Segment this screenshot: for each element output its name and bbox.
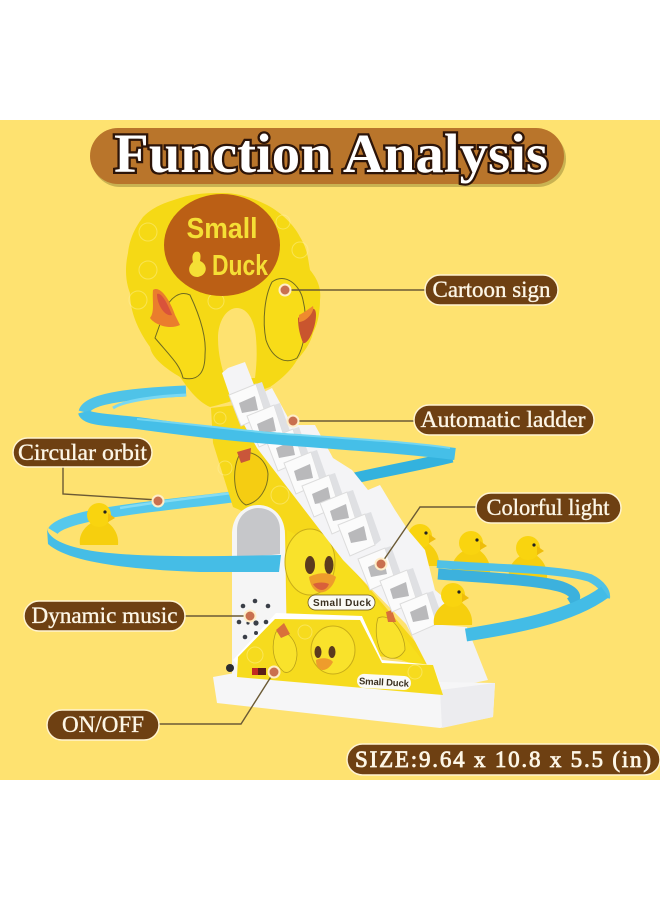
ladder: steps bbox=[229, 382, 443, 635]
speaker holes bbox=[237, 599, 270, 639]
toy ducks behind the ladder bbox=[401, 524, 547, 578]
callout: ON/OFF: ON/OFF bbox=[62, 712, 144, 737]
toy: white arched tower bbox=[232, 505, 287, 680]
switch and jack bbox=[226, 664, 266, 675]
panel: large duck character bbox=[285, 529, 336, 595]
ladder: white toothed band bbox=[222, 362, 470, 625]
cartoon sign board bbox=[126, 193, 320, 407]
panel: flying duck bbox=[273, 631, 297, 672]
toy: upper circular track, back lane bbox=[84, 391, 452, 478]
sign: brown oval bbox=[164, 194, 280, 296]
toy: white stepped base bbox=[213, 613, 495, 728]
panel: Small Duck tag bbox=[308, 595, 375, 610]
callout: Cartoon sign: Cartoon sign bbox=[432, 277, 551, 302]
sign: name text: Small bbox=[186, 213, 258, 245]
toy: right circular track bbox=[437, 564, 606, 635]
callout: Dynamic music: Dynamic music bbox=[32, 603, 177, 628]
callout: Colorful light bbox=[376, 493, 621, 570]
panel: side duck bbox=[376, 617, 405, 658]
panel: Small Duck tag: Small Duck bbox=[313, 598, 371, 609]
callout: Circular orbit: Circular orbit bbox=[18, 440, 148, 465]
callout: Dynamic music bbox=[24, 601, 256, 631]
title banner: Function Analysis bbox=[114, 123, 548, 184]
callout: ON/OFF bbox=[47, 666, 280, 740]
callout: Cartoon sign bbox=[280, 275, 558, 305]
toy: front yellow duck panel bbox=[285, 529, 430, 670]
sign: name text: Duck bbox=[212, 250, 269, 282]
toy duck on lower track bbox=[80, 503, 118, 545]
toy: yellow rear panel with duck pattern bbox=[211, 405, 436, 666]
sign: name text bbox=[186, 213, 269, 282]
sign: left cartoon duck bbox=[150, 289, 205, 379]
toy: upper circular track, front lane bbox=[84, 412, 455, 454]
size label: SIZE:9.64 x 10.8 x 5.5 (in) bbox=[355, 747, 651, 772]
automatic ladder bbox=[222, 362, 470, 635]
callout: Automatic ladder bbox=[288, 405, 594, 435]
toy duck on front of ladder bbox=[434, 583, 472, 625]
sign: faint pattern bbox=[129, 215, 308, 309]
panel: lower duck character bbox=[311, 626, 355, 674]
toy: lower yellow duck panel bbox=[237, 610, 443, 695]
yellow background bbox=[0, 120, 660, 780]
callout: Automatic ladder: Automatic ladder bbox=[420, 407, 586, 432]
callout: Colorful light: Colorful light bbox=[486, 495, 610, 520]
toy: lower circular track, back lane bbox=[53, 493, 232, 531]
toy: lower circular track, front lane bbox=[47, 528, 281, 572]
callout: Circular orbit bbox=[13, 438, 164, 506]
sign: right cartoon duck bbox=[264, 278, 316, 361]
panel: Small Duck tag lower: Small Duck bbox=[359, 676, 410, 690]
